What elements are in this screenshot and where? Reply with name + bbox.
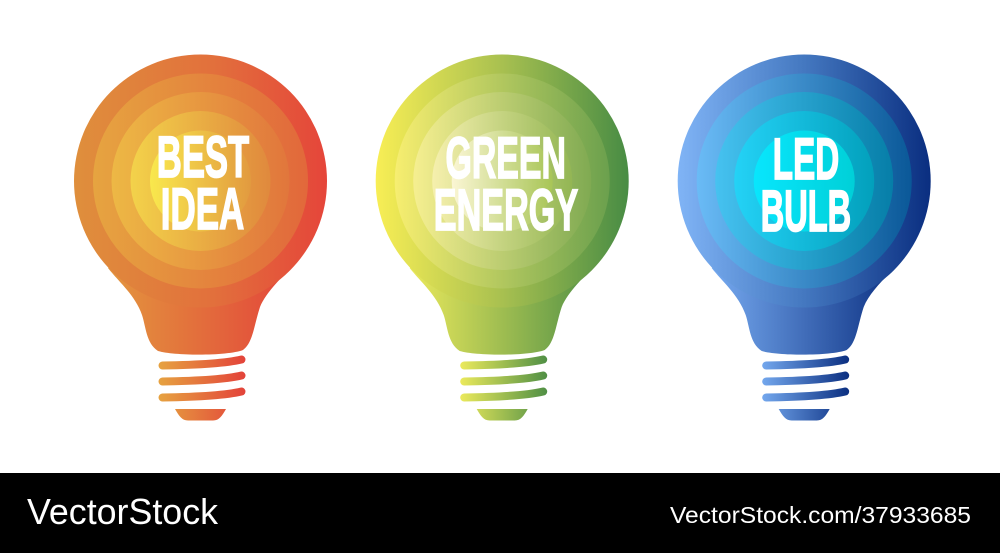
bulb neck bbox=[108, 200, 297, 355]
label: led bulb: BULB bbox=[761, 179, 851, 244]
screw base bbox=[779, 409, 830, 420]
label: best idea bbox=[157, 125, 249, 242]
screw base bbox=[477, 409, 528, 420]
label: best idea: BEST bbox=[157, 125, 249, 190]
label: green energy: GREEN bbox=[446, 126, 566, 191]
label: led bulb bbox=[761, 127, 851, 244]
bulb glass rings bbox=[376, 54, 629, 308]
label: green energy bbox=[434, 126, 578, 243]
label: best idea: IDEA bbox=[161, 177, 244, 242]
footer logo text: VectorStock bbox=[27, 491, 219, 532]
bulb neck bbox=[410, 200, 599, 355]
screw base bbox=[175, 409, 226, 420]
footer image id: VectorStock.com/37933685 bbox=[670, 502, 971, 528]
bulb: best idea (orange) bbox=[74, 54, 327, 420]
bulb: led bulb (blue) bbox=[678, 54, 931, 420]
label: led bulb: LED bbox=[773, 127, 839, 192]
label: green energy: ENERGY bbox=[434, 178, 578, 243]
bulb: green energy bbox=[376, 54, 629, 420]
screw threads bbox=[464, 360, 543, 398]
footer bar bbox=[0, 473, 1000, 553]
screw threads bbox=[766, 360, 845, 398]
screw threads bbox=[162, 360, 242, 398]
bulb glass rings bbox=[74, 54, 327, 308]
bulb neck bbox=[712, 200, 901, 355]
bulb glass rings bbox=[678, 54, 931, 308]
